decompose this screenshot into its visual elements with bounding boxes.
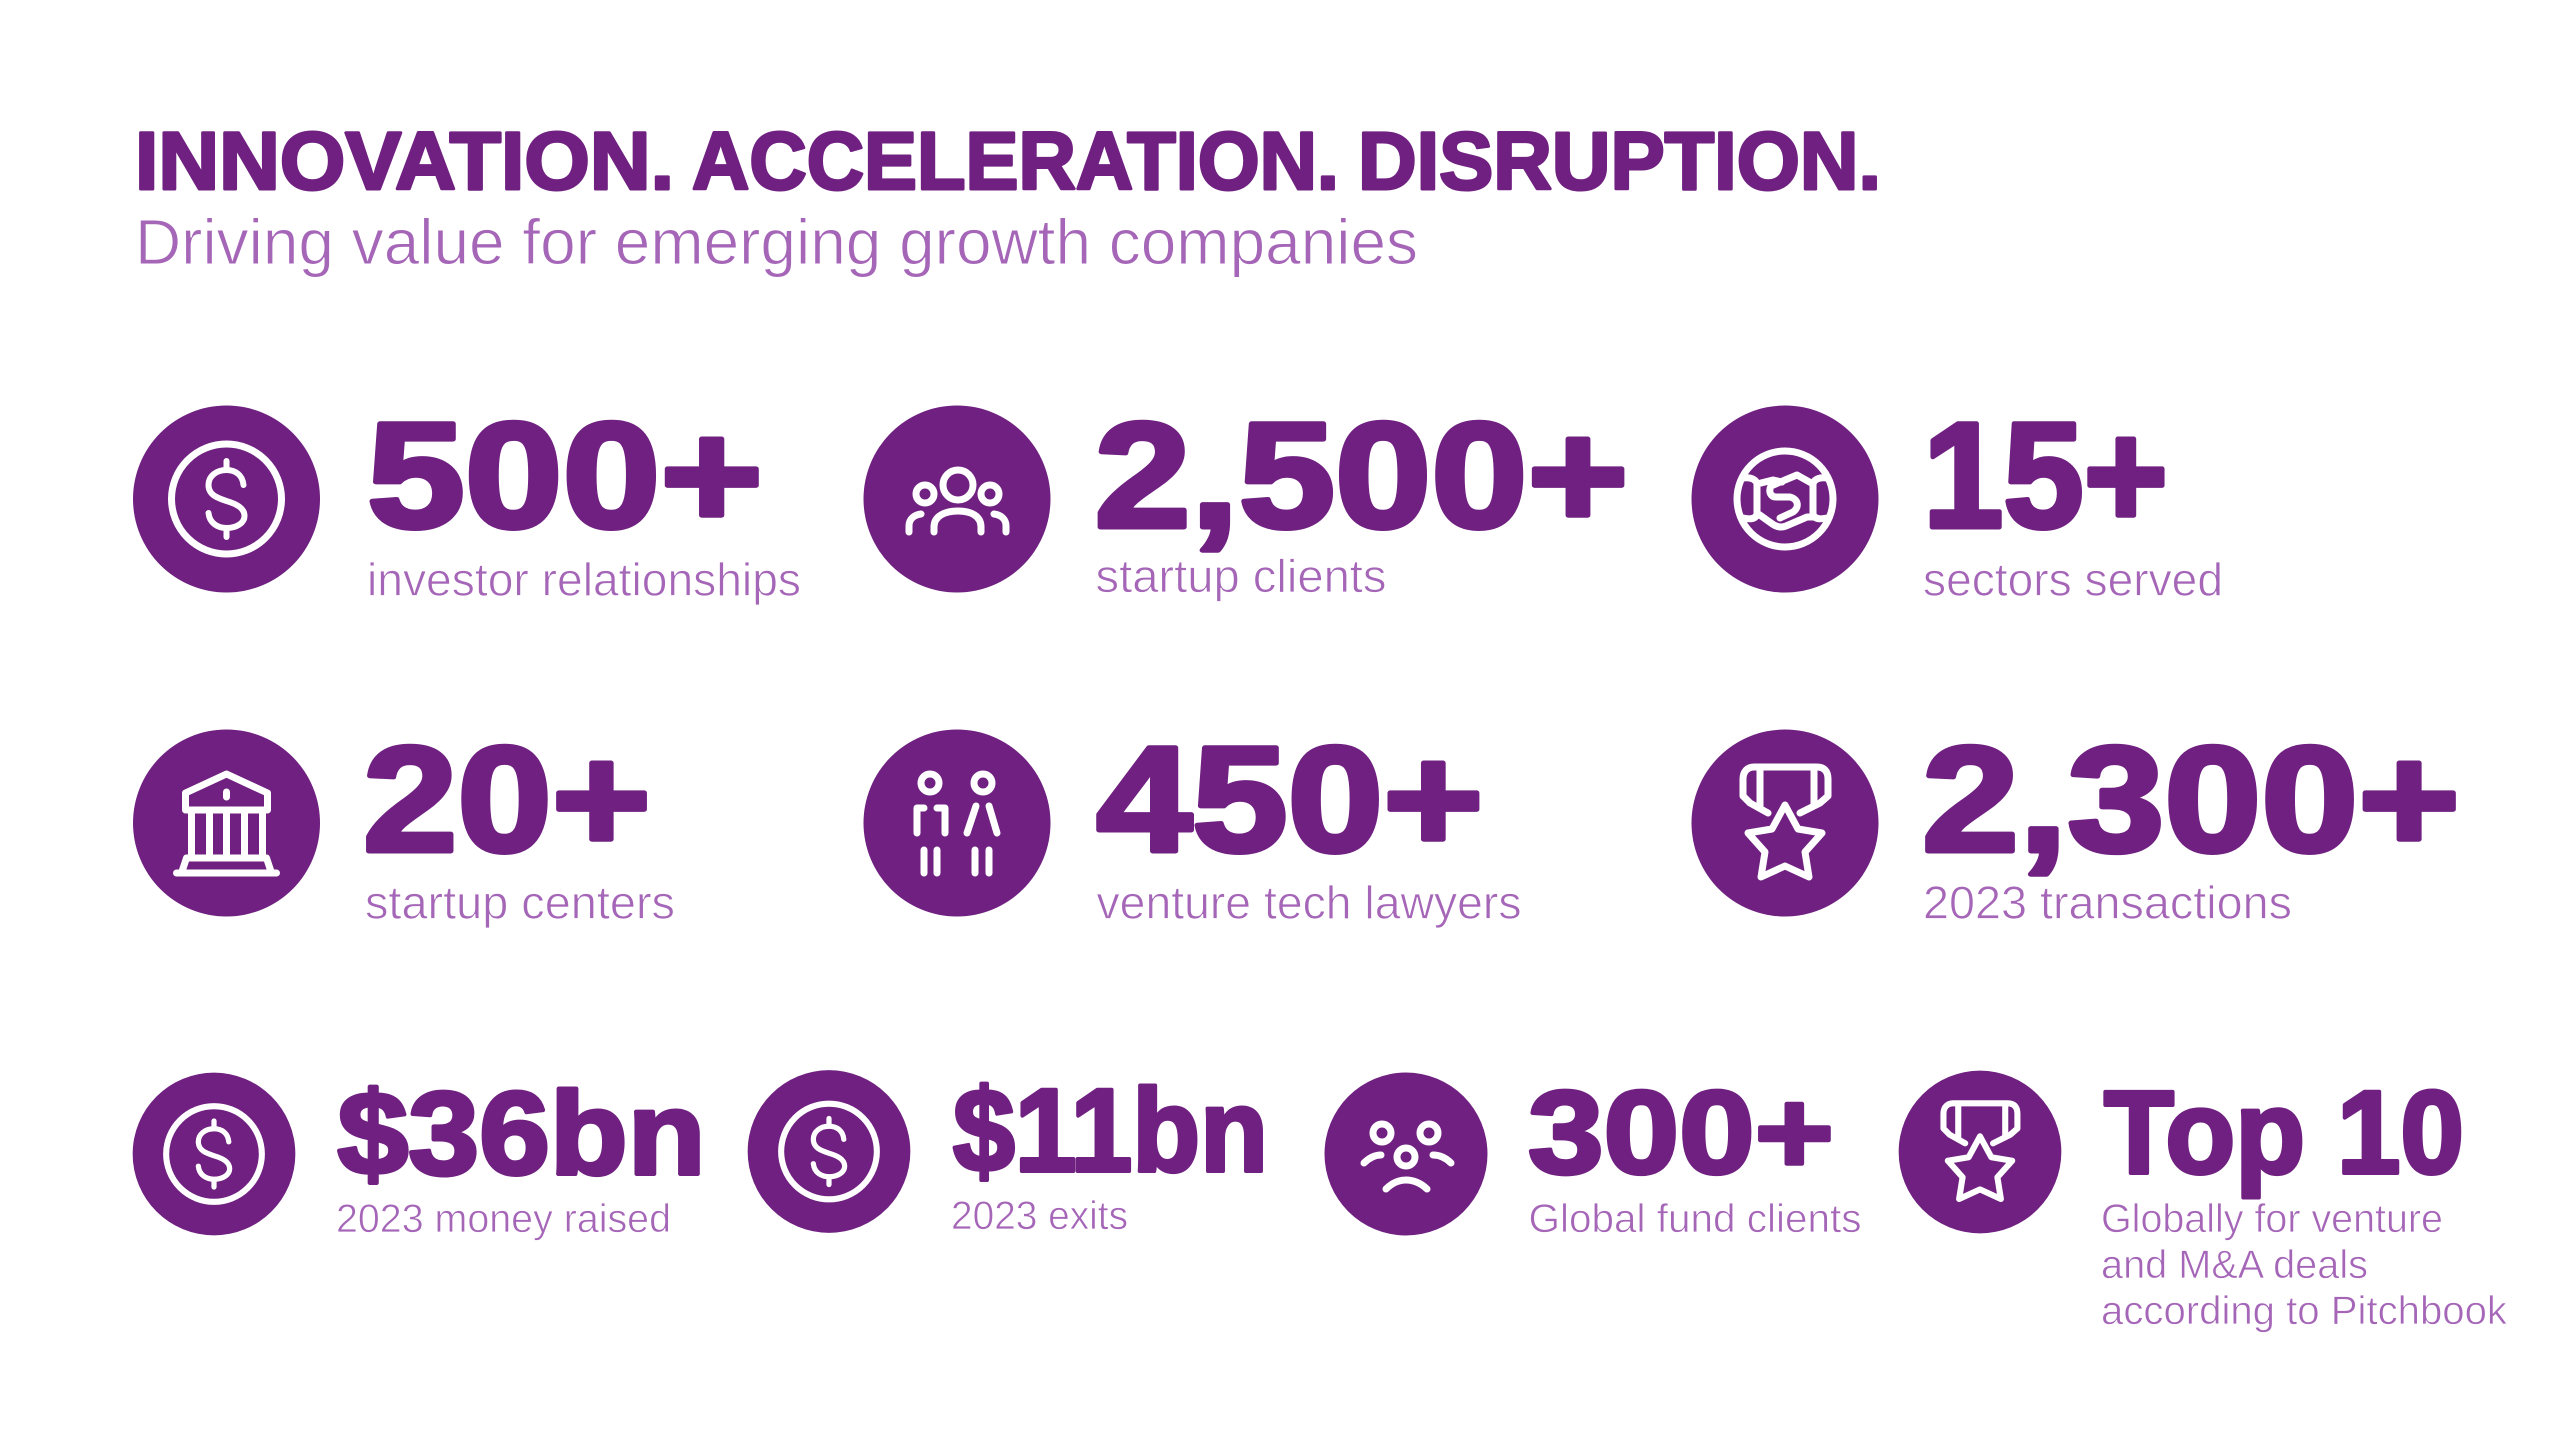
stat: 450+: 450+ [1096,715,1484,883]
icon: three people [1324,1072,1488,1236]
icon: medal with star [1692,730,1878,916]
panel: sectors served [1692,391,2223,606]
label: 2023 money raised [336,1197,671,1241]
panel: investor relationships [133,391,801,606]
panel: venture tech lawyers [864,715,1522,928]
label: and M&A deals [2101,1243,2368,1287]
title: DISRUPTION. [1358,116,1881,207]
panel: 2023 money raised [133,1068,705,1241]
label: 2023 exits [951,1194,1128,1238]
label: 2023 transactions [1923,876,2292,928]
label: Globally for venture [2101,1197,2443,1241]
label: sectors served [1923,554,2223,606]
stat: $11bn: $11bn [953,1065,1268,1197]
icon: dollar coin [133,1073,295,1235]
stat: 300+: 300+ [1528,1067,1834,1199]
label: Global fund clients [1528,1197,1862,1241]
title [135,116,1881,207]
title: ACCELERATION. [692,116,1339,207]
icon: group of people [864,406,1050,592]
stat: 20+: 20+ [363,715,651,883]
label: startup clients [1096,550,1386,602]
panel: 2023 transactions [1692,715,2460,928]
stat: 500+: 500+ [367,391,763,559]
stat: 15+: 15+ [1923,391,2168,559]
stat: Top 10: Top 10 [2104,1067,2464,1199]
icon: bank building [133,730,320,916]
stat: 2,500+: 2,500+ [1094,391,1628,559]
icon: two people [864,730,1050,916]
panel: global fund clients [1324,1067,1862,1241]
panel: startup clients [864,391,1628,602]
icon: handshake [1692,406,1878,592]
panel: 2023 exits [748,1065,1268,1238]
icon: dollar coin [748,1070,910,1233]
label: startup centers [365,876,675,928]
panel: startup centers [133,715,675,928]
label [2101,1197,2508,1333]
label: according to Pitchbook [2101,1289,2508,1333]
stat: 2,300+: 2,300+ [1922,715,2460,883]
stat: $36bn: $36bn [338,1068,706,1200]
icon: dollar coin [133,406,320,592]
icon: medal with star [1899,1071,2061,1233]
label: venture tech lawyers [1096,876,1522,928]
subtitle: Driving value for emerging growth companies [135,206,1418,278]
panel: top 10 [1899,1067,2508,1333]
title: INNOVATION. [135,116,674,207]
label: investor relationships [367,554,801,606]
